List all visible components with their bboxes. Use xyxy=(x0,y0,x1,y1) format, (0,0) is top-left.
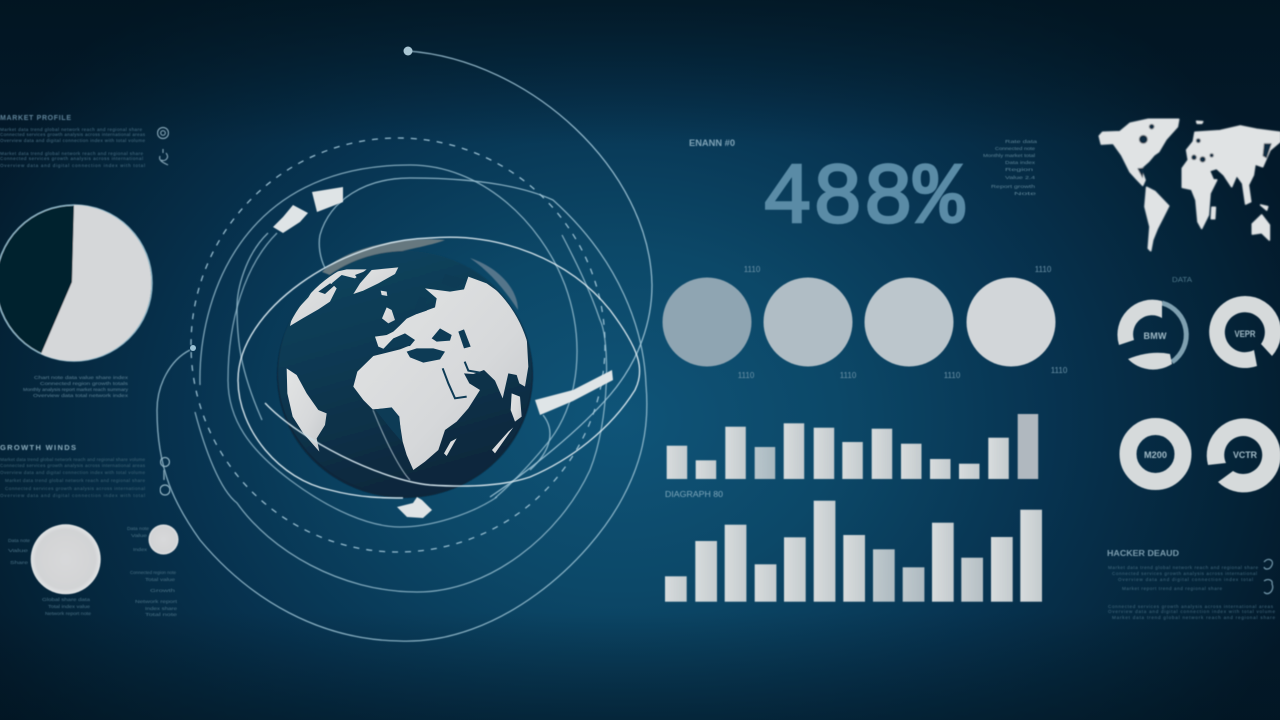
body copy: Connected services growth analysis across international xyxy=(5,486,145,491)
bubble captions: Index xyxy=(133,547,148,552)
orbit lines behind the globe xyxy=(157,51,652,641)
side notes: Data index xyxy=(1005,160,1036,166)
side notes: Monthly market total xyxy=(983,153,1035,159)
body copy: Market data trend global network reach and regional share xyxy=(1108,565,1258,570)
body copy: Market data trend global network reach and regional share xyxy=(0,127,142,132)
continents xyxy=(287,267,528,470)
body copy: Connected services growth analysis across international areas xyxy=(0,463,146,468)
side notes: Connected note xyxy=(995,146,1035,152)
body copy xyxy=(0,127,146,168)
pie caption xyxy=(23,375,129,399)
donut 4: VCTR xyxy=(1233,450,1257,460)
pie caption: Overview data total network index xyxy=(33,393,129,399)
bubble captions: Total note xyxy=(145,612,178,617)
icons: lower left xyxy=(160,458,170,495)
donut section label: DATA xyxy=(1172,277,1192,284)
donut 2 xyxy=(1209,296,1280,368)
world map xyxy=(1099,119,1280,251)
left top text block xyxy=(0,115,146,168)
donut charts xyxy=(1117,296,1280,492)
orbit start dot xyxy=(404,46,412,56)
orbit marker xyxy=(190,345,196,351)
icons xyxy=(1264,559,1273,594)
circle labels xyxy=(738,265,1068,380)
left lower text block xyxy=(0,443,146,498)
chart label: DIAGRAPH 80 xyxy=(665,489,723,499)
side notes: Report growth xyxy=(991,184,1035,190)
body copy: Connected services growth analysis across international areas xyxy=(1108,604,1274,609)
donut 3: M200 xyxy=(1144,450,1167,460)
body copy: Overview data and digital connection index with total volume xyxy=(0,138,145,143)
circle labels: 1110 xyxy=(944,371,961,380)
body copy: Overview data and digital connection index with total xyxy=(0,163,145,168)
heading: GROWTH WINDS xyxy=(0,443,76,452)
body copy: Overview data and digital connection index with total volume xyxy=(1108,609,1275,614)
body copy: Market data trend global network reach and regional share xyxy=(1112,615,1275,620)
bubble captions: Data note xyxy=(8,538,30,543)
bubble captions: Index share xyxy=(145,606,178,611)
bubble captions: Connected region note xyxy=(130,570,176,575)
pie caption: Monthly analysis report market reach summary xyxy=(23,387,129,393)
circle labels: 1110 xyxy=(1051,366,1068,375)
body copy: Overview data and digital connection index total xyxy=(1118,577,1253,582)
bubble captions: Value xyxy=(8,548,29,553)
body copy: Market report trend and regional share xyxy=(1122,586,1222,591)
bubble captions: Data note xyxy=(127,526,149,531)
circle labels: 1110 xyxy=(1035,265,1052,274)
globe rim crescents xyxy=(277,239,533,498)
body copy: Market data trend global network reach and regional share volume xyxy=(0,457,145,462)
big percentage: 488% xyxy=(762,150,964,248)
bubble captions: Network report xyxy=(135,599,178,604)
label: ENANN #0 xyxy=(689,138,735,148)
bubble captions xyxy=(8,526,178,617)
body copy: Market data trend global network reach and regional share xyxy=(0,151,143,156)
icons: top left xyxy=(158,128,168,165)
bubble captions: Growth xyxy=(150,588,176,593)
side notes xyxy=(983,139,1037,197)
pie caption: Connected region growth totals xyxy=(40,381,129,387)
body copy: Market data trend global network reach and regional share xyxy=(5,478,145,483)
satellite fragments xyxy=(273,187,432,518)
circle row xyxy=(662,278,1056,366)
comet streak xyxy=(535,370,613,415)
bubble captions: Global share data xyxy=(42,597,91,602)
body copy: Overview data and digital connection index with total xyxy=(0,493,145,498)
body copy xyxy=(1108,565,1275,620)
headline stat xyxy=(689,138,1037,248)
body copy xyxy=(0,457,146,498)
main orbit ring in front of the globe xyxy=(238,237,640,498)
donut 1 xyxy=(1117,300,1186,370)
body copy: Connected services growth analysis across international areas xyxy=(0,132,146,137)
bubble captions: Value xyxy=(131,533,148,538)
circle labels: 1110 xyxy=(738,371,755,380)
side notes: Value 2.4 xyxy=(1005,175,1035,181)
side notes: Note xyxy=(1014,191,1037,197)
heading: MARKET PROFILE xyxy=(0,115,71,122)
side notes: Rate data xyxy=(1005,139,1037,145)
bottom bar chart xyxy=(665,501,1042,602)
globe xyxy=(277,239,533,498)
donut 2: VEPR xyxy=(1234,329,1256,339)
circle labels: 1110 xyxy=(744,265,761,274)
top bar chart xyxy=(667,414,1038,479)
large bubble xyxy=(31,524,101,594)
circle labels: 1110 xyxy=(840,371,857,380)
bubble captions: Total index value xyxy=(48,604,91,609)
pie caption: Chart note data value share index xyxy=(34,375,129,381)
body copy: Connected services growth analysis across international xyxy=(0,156,143,161)
body copy: Overview data and digital connection index with total volume xyxy=(0,470,145,475)
bubble captions: Total value xyxy=(145,577,176,582)
pie chart xyxy=(0,205,152,361)
heading: HACKER DEAUD xyxy=(1107,549,1179,558)
donut 1: BMW xyxy=(1144,331,1167,341)
donut 3 xyxy=(1128,426,1183,482)
donut 4 xyxy=(1207,418,1280,492)
bubble captions: Network report note xyxy=(45,611,92,616)
bubble captions: Share xyxy=(10,560,29,565)
side notes: Region xyxy=(1005,167,1034,173)
body copy: Connected services growth analysis across international xyxy=(1112,571,1257,576)
small bubble xyxy=(148,524,178,554)
bottom right text block xyxy=(1107,549,1275,620)
